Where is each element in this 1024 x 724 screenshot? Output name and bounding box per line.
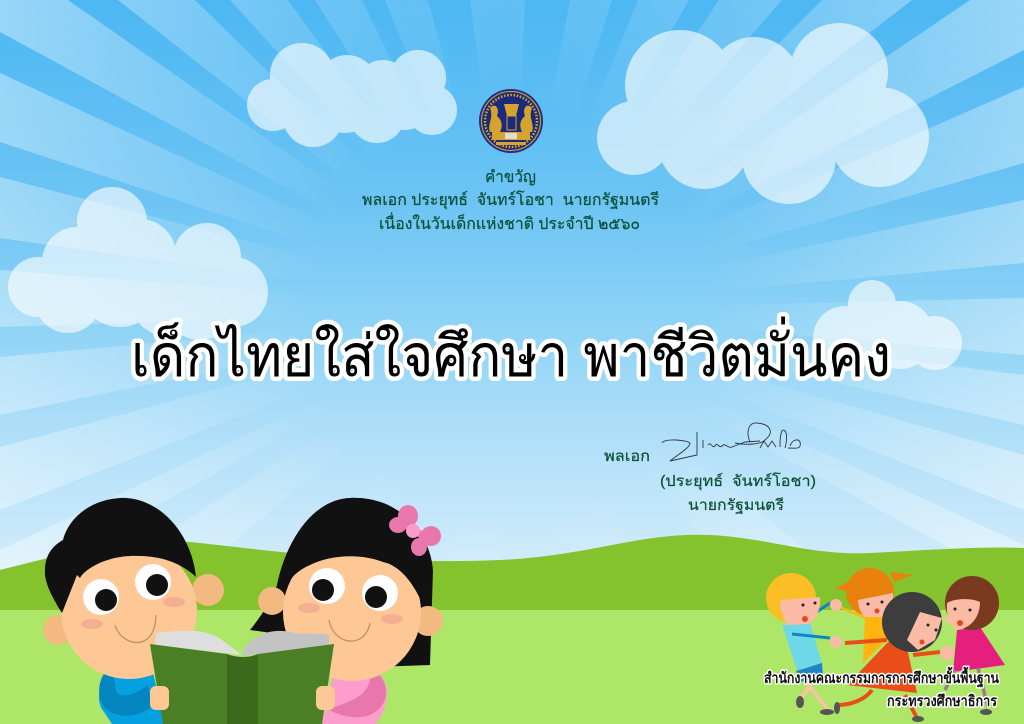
line: prime minister name: พลเอก ประยุทธ์ จันทร์โอชา นายกรัฐมนตรี xyxy=(362,190,659,210)
eyes and mouth xyxy=(954,608,972,626)
office name xyxy=(764,666,1000,710)
pigtails xyxy=(835,572,913,592)
motto heading xyxy=(362,169,659,233)
face xyxy=(947,599,980,630)
shorts xyxy=(796,663,823,682)
legs xyxy=(945,668,988,708)
cloud: top centre xyxy=(247,43,457,147)
legs xyxy=(800,678,830,712)
dress xyxy=(953,627,1005,672)
children reading a book xyxy=(43,498,443,724)
dress xyxy=(847,640,917,693)
spine xyxy=(227,654,258,724)
face xyxy=(858,593,893,617)
girl's eyes xyxy=(309,568,398,611)
face xyxy=(780,597,820,625)
shoes xyxy=(834,702,924,722)
girl's face xyxy=(283,543,421,681)
hair xyxy=(945,576,999,630)
girl's blush xyxy=(298,603,403,624)
cloud: right xyxy=(813,280,962,370)
orange-haired girl xyxy=(835,568,913,663)
boy's sleeve xyxy=(99,666,152,716)
eyes and mouth xyxy=(920,624,938,644)
girl's body xyxy=(322,666,387,724)
right cover xyxy=(258,644,334,724)
shoes xyxy=(796,696,834,715)
hands xyxy=(150,686,335,710)
boy's face xyxy=(61,543,197,679)
eyes and mouth xyxy=(802,602,816,622)
printed name: (ประยุทธ์ จันทร์โอชา) xyxy=(660,472,816,491)
shirt xyxy=(782,623,822,670)
open book xyxy=(150,631,334,724)
boy's ears xyxy=(43,574,224,645)
girl's ears xyxy=(258,587,443,636)
hands xyxy=(830,636,954,660)
girl's smile xyxy=(329,620,370,641)
far arm xyxy=(815,603,830,613)
arms xyxy=(845,640,940,655)
boy xyxy=(43,498,224,724)
girl's fringe xyxy=(283,498,427,603)
line: ministry: กระทรวงศึกษาธิการ xyxy=(887,692,998,710)
line: occasion: เนื่องในวันเด็กแห่งชาติ ประจำปี ๒๕๖๐ xyxy=(379,212,640,233)
hair xyxy=(846,568,894,616)
government seal xyxy=(479,89,543,153)
cloud: top right xyxy=(597,23,929,204)
arm xyxy=(942,618,958,625)
arm xyxy=(840,607,866,618)
boy's smile xyxy=(115,615,156,642)
hair xyxy=(882,592,942,652)
shoe xyxy=(980,709,992,715)
cloud: left xyxy=(8,187,268,340)
dark-haired child xyxy=(830,592,954,722)
left page xyxy=(155,631,242,655)
hand xyxy=(830,599,842,611)
girl's sleeve xyxy=(325,668,386,717)
brown-haired child xyxy=(942,576,1005,715)
line: motto label: คำขวัญ xyxy=(485,169,536,186)
signature block xyxy=(604,423,816,514)
boy's blush xyxy=(81,597,185,629)
children playing in a circle xyxy=(766,568,1005,722)
shirt xyxy=(863,615,887,663)
signature scribble xyxy=(662,423,800,461)
boy's body xyxy=(99,660,165,724)
blonde boy xyxy=(766,573,842,715)
title: นายกรัฐมนตรี xyxy=(688,497,784,514)
boy's hair xyxy=(45,498,196,613)
eyes and mouth xyxy=(866,600,884,614)
hair bow xyxy=(389,505,441,556)
rank label: พลเอก xyxy=(604,448,650,465)
lawn xyxy=(0,610,1024,724)
boy's eyes xyxy=(83,564,171,615)
handwritten motto: เด็กไทยใส่ใจศึกษา พาชีวิตมั่นคง xyxy=(131,316,891,389)
left cover xyxy=(150,644,227,724)
green hills xyxy=(0,535,1024,620)
hair xyxy=(766,573,816,623)
right page xyxy=(243,631,329,656)
girl xyxy=(250,498,443,724)
background: sky with sun rays xyxy=(0,0,1024,570)
legs xyxy=(838,690,918,720)
face xyxy=(907,612,942,650)
girl's hair back xyxy=(250,498,433,667)
near arm xyxy=(792,634,830,638)
